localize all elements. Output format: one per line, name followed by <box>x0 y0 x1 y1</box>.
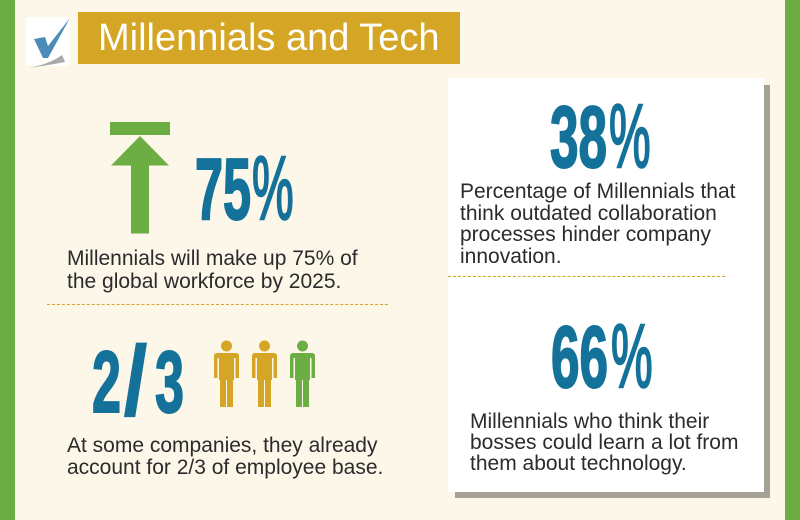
card dashed divider <box>448 276 725 277</box>
text: 75% description <box>67 247 358 293</box>
panel: white card <box>448 78 764 492</box>
icon: person green <box>290 340 315 407</box>
icon: three people <box>214 340 315 407</box>
text: 2/3 description: At some companies, they already <box>67 434 378 457</box>
stat: 2/3 <box>92 335 184 425</box>
text: 2/3 description <box>67 434 383 479</box>
text: 2/3 description: account for 2/3 of employee base. <box>67 456 383 479</box>
title banner: Millennials and Tech <box>98 17 440 59</box>
text: 66% description <box>470 410 738 475</box>
left dashed divider <box>47 304 388 305</box>
text: 66% description: Millennials who think their <box>470 410 709 433</box>
text: 38% description: Percentage of Millennials that <box>460 180 736 203</box>
card shadow <box>455 85 770 498</box>
text: 38% description: innovation. <box>460 244 562 268</box>
text: 38% description: processes hinder company <box>460 223 711 246</box>
stat: 75% <box>195 140 294 230</box>
icon: person gold 1 <box>214 340 239 407</box>
text: 66% description: bosses could learn a lot from <box>470 431 738 454</box>
text: 66% description: them about technology. <box>470 452 687 475</box>
left green border <box>0 0 15 520</box>
text: 75% description: Millennials will make up 75% of <box>67 247 358 270</box>
right green border <box>785 0 800 520</box>
icon: person gold 2 <box>252 340 277 407</box>
icon: up arrow with bar <box>110 122 170 234</box>
icon: check mark logo <box>26 17 70 68</box>
stat: 38% <box>550 93 651 183</box>
text: 38% description <box>460 180 736 268</box>
stat: 66% <box>551 313 653 403</box>
text: 38% description: think outdated collaboration <box>460 202 717 224</box>
text: 75% description: the global workforce by 2025. <box>67 270 341 293</box>
